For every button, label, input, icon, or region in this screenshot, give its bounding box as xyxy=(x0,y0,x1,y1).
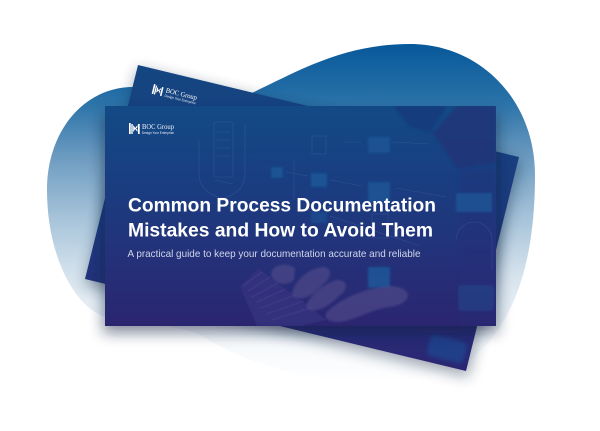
subtitle: A practical guide to keep your documentation accurate and reliable xyxy=(128,248,421,260)
title: Mistakes and How to Avoid Them xyxy=(128,220,433,242)
logo wordmark: BOC Group xyxy=(142,123,174,131)
front card logo xyxy=(129,123,174,135)
background photo: flowchart and laptop xyxy=(199,106,496,326)
title: Common Process Documentation xyxy=(128,194,436,216)
flowchart squares xyxy=(271,137,494,311)
back card shadow xyxy=(85,69,521,377)
logo tagline: Design Your Enterprise xyxy=(164,94,196,105)
keyboard xyxy=(240,268,327,326)
background blob xyxy=(47,44,535,381)
laptop and hands xyxy=(240,265,408,326)
logo mark xyxy=(152,84,164,96)
front brochure card xyxy=(105,106,496,326)
logo tagline: Design Your Enterprise xyxy=(142,131,174,135)
title xyxy=(128,194,436,242)
hands xyxy=(271,265,408,322)
logo wordmark: BOC Group xyxy=(165,87,198,102)
back brochure card xyxy=(85,65,519,371)
front card shadow xyxy=(103,114,498,333)
dark hexagon shapes xyxy=(395,106,496,168)
flowchart connectors xyxy=(199,122,492,270)
back card logo xyxy=(151,84,198,105)
logo mark xyxy=(129,123,140,134)
back card blue highlight xyxy=(427,335,467,364)
